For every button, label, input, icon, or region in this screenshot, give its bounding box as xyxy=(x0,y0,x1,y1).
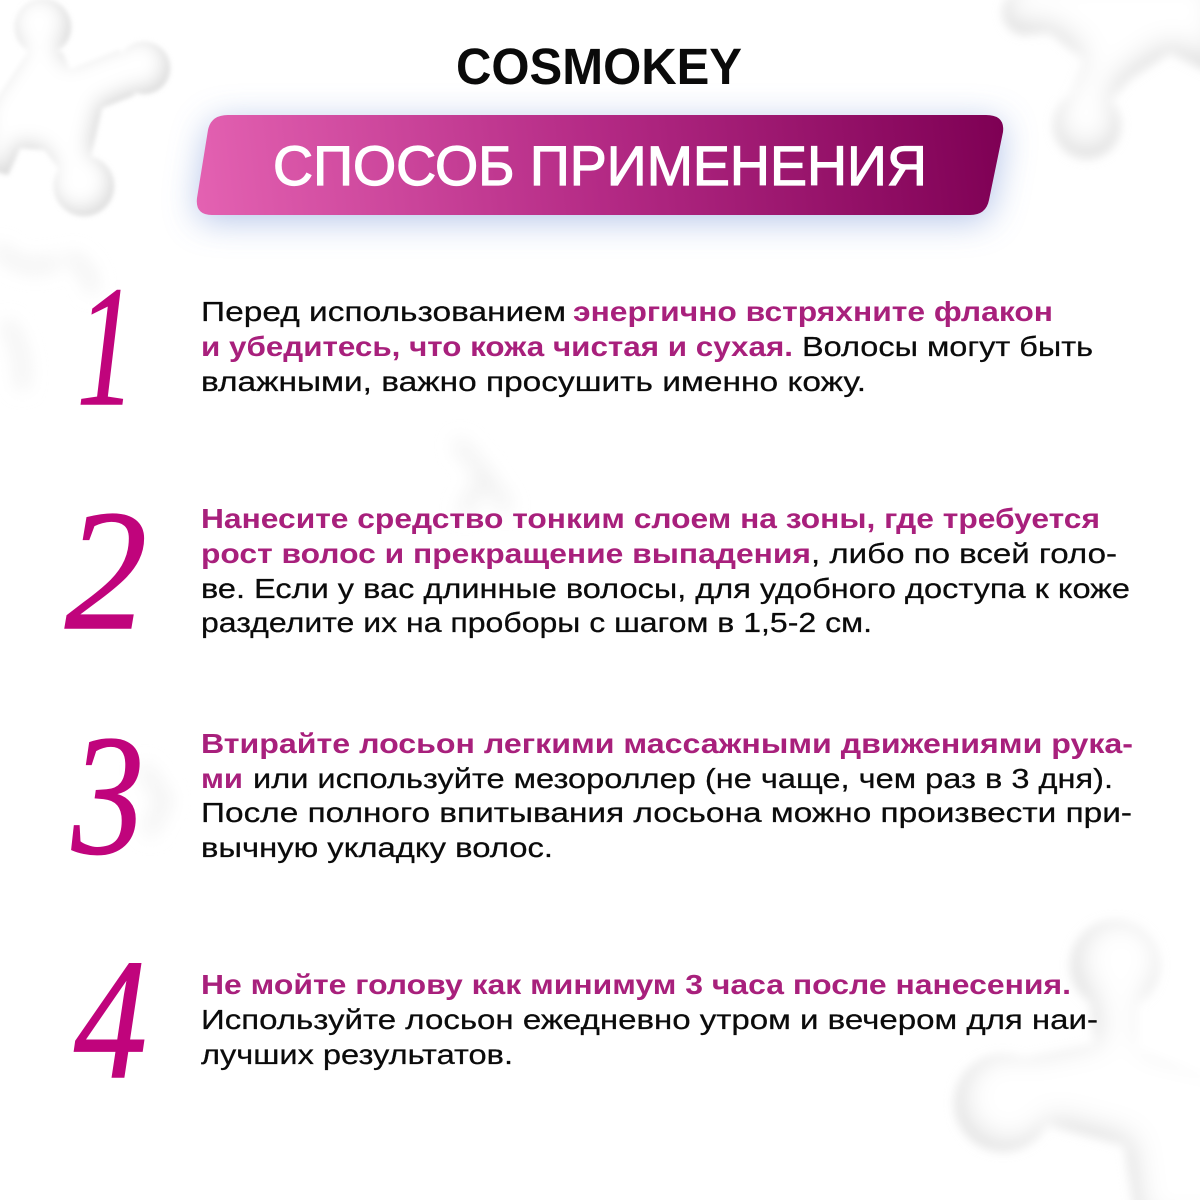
molecule: top right xyxy=(1002,0,1200,158)
step 3 text: или используйте мезороллер (не чаще, чем раз в 3 дня). xyxy=(253,763,1113,794)
step 2 text: рост волос и прекращение выпадения xyxy=(201,538,811,569)
step 1 text: влажными, важно просушить именно кожу. xyxy=(201,366,866,397)
step 4 xyxy=(74,925,1098,1115)
step 4 text: лучших результатов. xyxy=(201,1039,513,1070)
molecule: top left xyxy=(0,0,170,216)
molecule: centre faint xyxy=(145,445,505,830)
step 2 text xyxy=(201,503,1130,638)
number 1: 1 xyxy=(77,252,135,442)
step 2 text: Нанесите средство тонким слоем на зоны, где требуется xyxy=(201,503,1100,534)
number 4: 4 xyxy=(74,925,147,1115)
step 1 text: Волосы могут быть xyxy=(802,331,1093,362)
step 1 text: Перед использованием xyxy=(201,296,566,327)
molecule: left faint xyxy=(0,250,92,385)
step 3 text: вычную укладку волос. xyxy=(201,832,553,863)
step 3 text: Втирайте лосьон легкими массажными движениями рука- xyxy=(201,728,1133,759)
step 2 xyxy=(65,476,1130,666)
step 1 text xyxy=(201,296,1093,397)
step 1 text: и убедитесь, что кожа чистая и сухая. xyxy=(201,331,793,362)
heading banner xyxy=(197,115,1003,221)
step 4 text: Не мойте голову как минимум 3 часа после нанесения. xyxy=(201,969,1071,1000)
step 1 text: энергично встряхните флакон xyxy=(573,296,1053,327)
step 1 xyxy=(77,252,1093,442)
step 3 text xyxy=(201,728,1133,863)
heading banner: СПОСОБ ПРИМЕНЕНИЯ xyxy=(273,134,927,197)
molecule: bottom right xyxy=(955,915,1200,1200)
step 2 text: , либо по всей голо- xyxy=(811,538,1117,569)
step 3 text: После полного впитывания лосьона можно произвести при- xyxy=(201,797,1132,828)
brand title: COSMOKEY xyxy=(456,38,742,95)
step 4 text: Используйте лосьон ежедневно утром и вечером для наи- xyxy=(201,1004,1098,1035)
step 4 text xyxy=(201,969,1098,1070)
step 3 xyxy=(71,701,1133,891)
number 3: 3 xyxy=(71,701,144,891)
number 2: 2 xyxy=(65,476,147,666)
step 2 text: ве. Если у вас длинные волосы, для удобного доступа к коже xyxy=(201,573,1130,604)
step 3 text: ми xyxy=(201,763,243,794)
step 2 text: разделите их на проборы с шагом в 1,5-2 см. xyxy=(201,607,872,638)
